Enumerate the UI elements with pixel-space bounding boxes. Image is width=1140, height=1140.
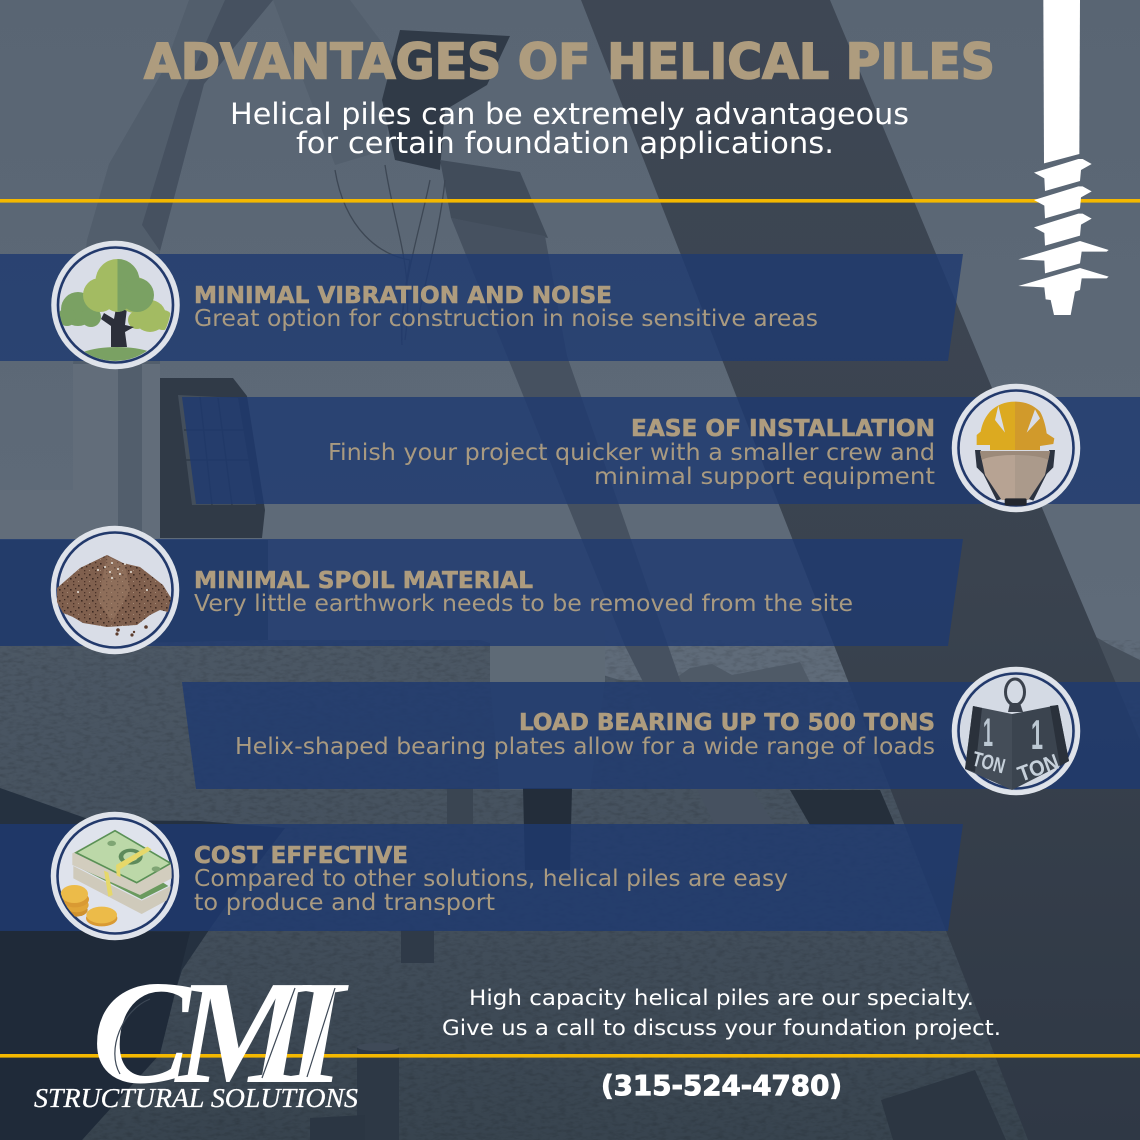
description: Very little earthwork needs to be removed from the site bbox=[194, 591, 853, 617]
title: ADVANTAGES OF HELICAL PILES bbox=[144, 34, 995, 90]
icon: one ton weight bbox=[954, 669, 1078, 793]
heading: COST EFFECTIVE bbox=[194, 843, 408, 869]
logo: CMI Structural Solutions: C bbox=[92, 951, 193, 1115]
description: Compared to other solutions, helical piles are easy bbox=[194, 866, 788, 892]
heading: MINIMAL VIBRATION AND NOISE bbox=[194, 283, 612, 309]
icon: one ton weight: TON bbox=[1014, 749, 1062, 787]
panel: cost effective bbox=[0, 814, 963, 938]
panel: load bearing bbox=[182, 669, 1140, 793]
panel: minimal vibration and noise bbox=[0, 243, 963, 381]
icon: soil pile bbox=[53, 528, 177, 652]
banner bbox=[182, 682, 1140, 789]
heading: EASE OF INSTALLATION bbox=[631, 416, 935, 442]
banner bbox=[0, 539, 963, 646]
icon: worker with hard hat bbox=[954, 386, 1078, 510]
icon: tree bbox=[54, 243, 178, 381]
logo: CMI Structural Solutions bbox=[34, 951, 359, 1115]
banner bbox=[182, 397, 1140, 504]
description: to produce and transport bbox=[194, 890, 495, 916]
phone number: (315-524-4780) bbox=[601, 1069, 842, 1102]
description: Helix-shaped bearing plates allow for a wide range of loads bbox=[235, 734, 935, 760]
description: Great option for construction in noise sensitive areas bbox=[194, 306, 818, 332]
heading: LOAD BEARING UP TO 500 TONS bbox=[519, 710, 935, 736]
heading: MINIMAL SPOIL MATERIAL bbox=[194, 568, 533, 594]
icon: one ton weight: 1 bbox=[1031, 711, 1043, 758]
icon: helical pile screw bbox=[1018, 0, 1109, 315]
panel: ease of installation bbox=[182, 386, 1140, 510]
icon: money stacks and coins bbox=[53, 814, 177, 938]
subtitle: for certain foundation applications. bbox=[296, 126, 834, 160]
icon: one ton weight: TON bbox=[970, 748, 1008, 778]
gold divider top bbox=[0, 199, 1140, 203]
logo: CMI Structural Solutions: STRUCTURAL SOLUTIONS bbox=[34, 1083, 359, 1113]
call to action: Give us a call to discuss your foundation project. bbox=[442, 1016, 1001, 1041]
call to action bbox=[442, 986, 1001, 1041]
description: minimal support equipment bbox=[594, 464, 935, 490]
subtitle: Helical piles can be extremely advantageous bbox=[230, 97, 909, 131]
description bbox=[194, 866, 788, 916]
icon: one ton weight: 1 bbox=[983, 711, 993, 755]
panel: minimal spoil material bbox=[0, 528, 963, 652]
banner bbox=[0, 824, 963, 931]
description: Finish your project quicker with a smaller crew and bbox=[328, 440, 935, 466]
description bbox=[328, 440, 935, 490]
logo: CMI Structural Solutions: I bbox=[285, 951, 349, 1115]
call to action: High capacity helical piles are our specialty. bbox=[469, 986, 974, 1011]
logo: CMI Structural Solutions: M bbox=[174, 951, 312, 1115]
banner bbox=[0, 254, 963, 361]
subtitle bbox=[230, 97, 909, 160]
gold divider bottom bbox=[0, 1054, 1140, 1058]
